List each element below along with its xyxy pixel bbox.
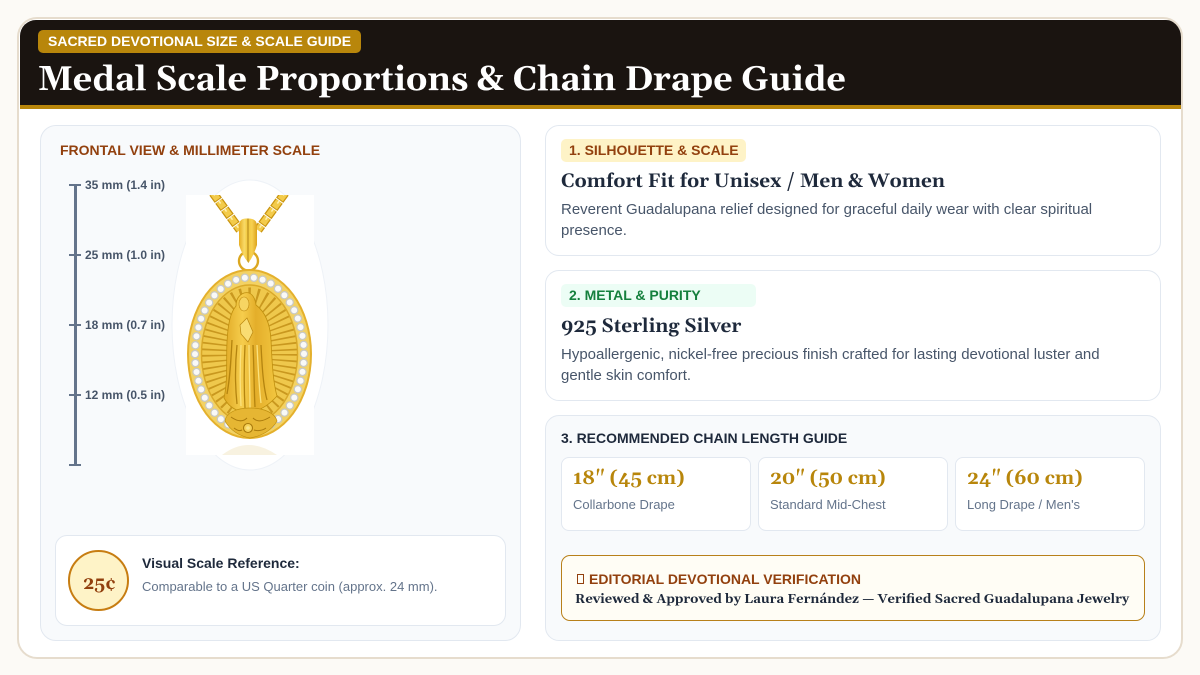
panel: frontal view and millimeter scale <box>40 125 521 641</box>
panel: metal and purity <box>545 270 1161 401</box>
coin description: Comparable to a US Quarter coin (approx. 24 mm). <box>142 579 438 594</box>
title: Medal Scale Proportions & Chain Drape Guide <box>38 58 846 102</box>
inner medal field <box>202 285 298 423</box>
panel: chain length guide <box>545 415 1161 641</box>
millimeter scale ruler: 25 mm (1.0 in) <box>85 248 165 262</box>
millimeter scale ruler: 18 mm (0.7 in) <box>85 318 165 332</box>
chain option 20 inch <box>758 457 948 531</box>
chain option 24 inch: Long Drape / Men's <box>967 497 1080 512</box>
Virgin figure <box>224 293 277 412</box>
stone ring <box>195 278 304 430</box>
chain option 24 inch: 24" (60 cm) <box>967 467 1083 491</box>
chain option 18 inch <box>561 457 751 531</box>
coin heading: Visual Scale Reference: <box>142 555 300 571</box>
metal heading: 925 Sterling Silver <box>561 315 741 339</box>
millimeter scale ruler: 12 mm (0.5 in) <box>85 388 165 402</box>
metal body: Hypoallergenic, nickel-free precious finish crafted for lasting devotional luster and gentle skin comfort. <box>561 346 1100 384</box>
chain option 20 inch: 20" (50 cm) <box>770 467 886 491</box>
silhouette heading: Comfort Fit for Unisex / Men & Women <box>561 170 945 194</box>
metal chip <box>561 284 756 307</box>
icon: quarter coin: 25¢ <box>83 573 116 596</box>
oval halo <box>172 180 328 470</box>
chain option 24 inch <box>955 457 1145 531</box>
millimeter scale ruler <box>69 178 165 466</box>
medal body <box>187 269 312 439</box>
editorial verification callout <box>561 555 1145 621</box>
panel: silhouette and scale <box>545 125 1161 256</box>
faint reflection <box>222 445 277 455</box>
base flowers <box>225 408 277 438</box>
millimeter scale ruler: 35 mm (1.4 in) <box>85 178 165 192</box>
chain option 20 inch: Standard Mid-Chest <box>770 497 886 512</box>
header badge: SACRED DEVOTIONAL SIZE & SCALE GUIDE <box>48 33 351 49</box>
verification heading: EDITORIAL DEVOTIONAL VERIFICATION <box>589 571 861 587</box>
metal chip: 2. METAL & PURITY <box>569 287 701 303</box>
white image backing <box>186 195 314 455</box>
silhouette chip: 1. SILHOUETTE & SCALE <box>569 142 739 158</box>
chain option 18 inch: Collarbone Drape <box>573 497 675 512</box>
silhouette chip <box>561 139 746 162</box>
header band <box>20 20 1182 109</box>
bail ring <box>239 252 258 270</box>
chain guide heading: 3. RECOMMENDED CHAIN LENGTH GUIDE <box>561 430 847 446</box>
bail <box>239 218 257 263</box>
chain option 18 inch: 18" (45 cm) <box>573 467 685 491</box>
verification text: Reviewed & Approved by Laura Fernández — Verified Sacred Guadalupana Jewelry <box>575 592 1129 608</box>
panel heading: FRONTAL VIEW & MILLIMETER SCALE <box>60 142 320 158</box>
chain <box>213 193 285 230</box>
header badge <box>38 30 361 53</box>
coin scale reference card <box>55 535 506 626</box>
silhouette body: Reverent Guadalupana relief designed for graceful daily wear with clear spiritual presence. <box>561 201 1092 239</box>
radial rays <box>218 304 280 404</box>
pendant image: gold Guadalupe medal on chain <box>172 180 328 470</box>
icon: quarter coin <box>68 550 129 611</box>
